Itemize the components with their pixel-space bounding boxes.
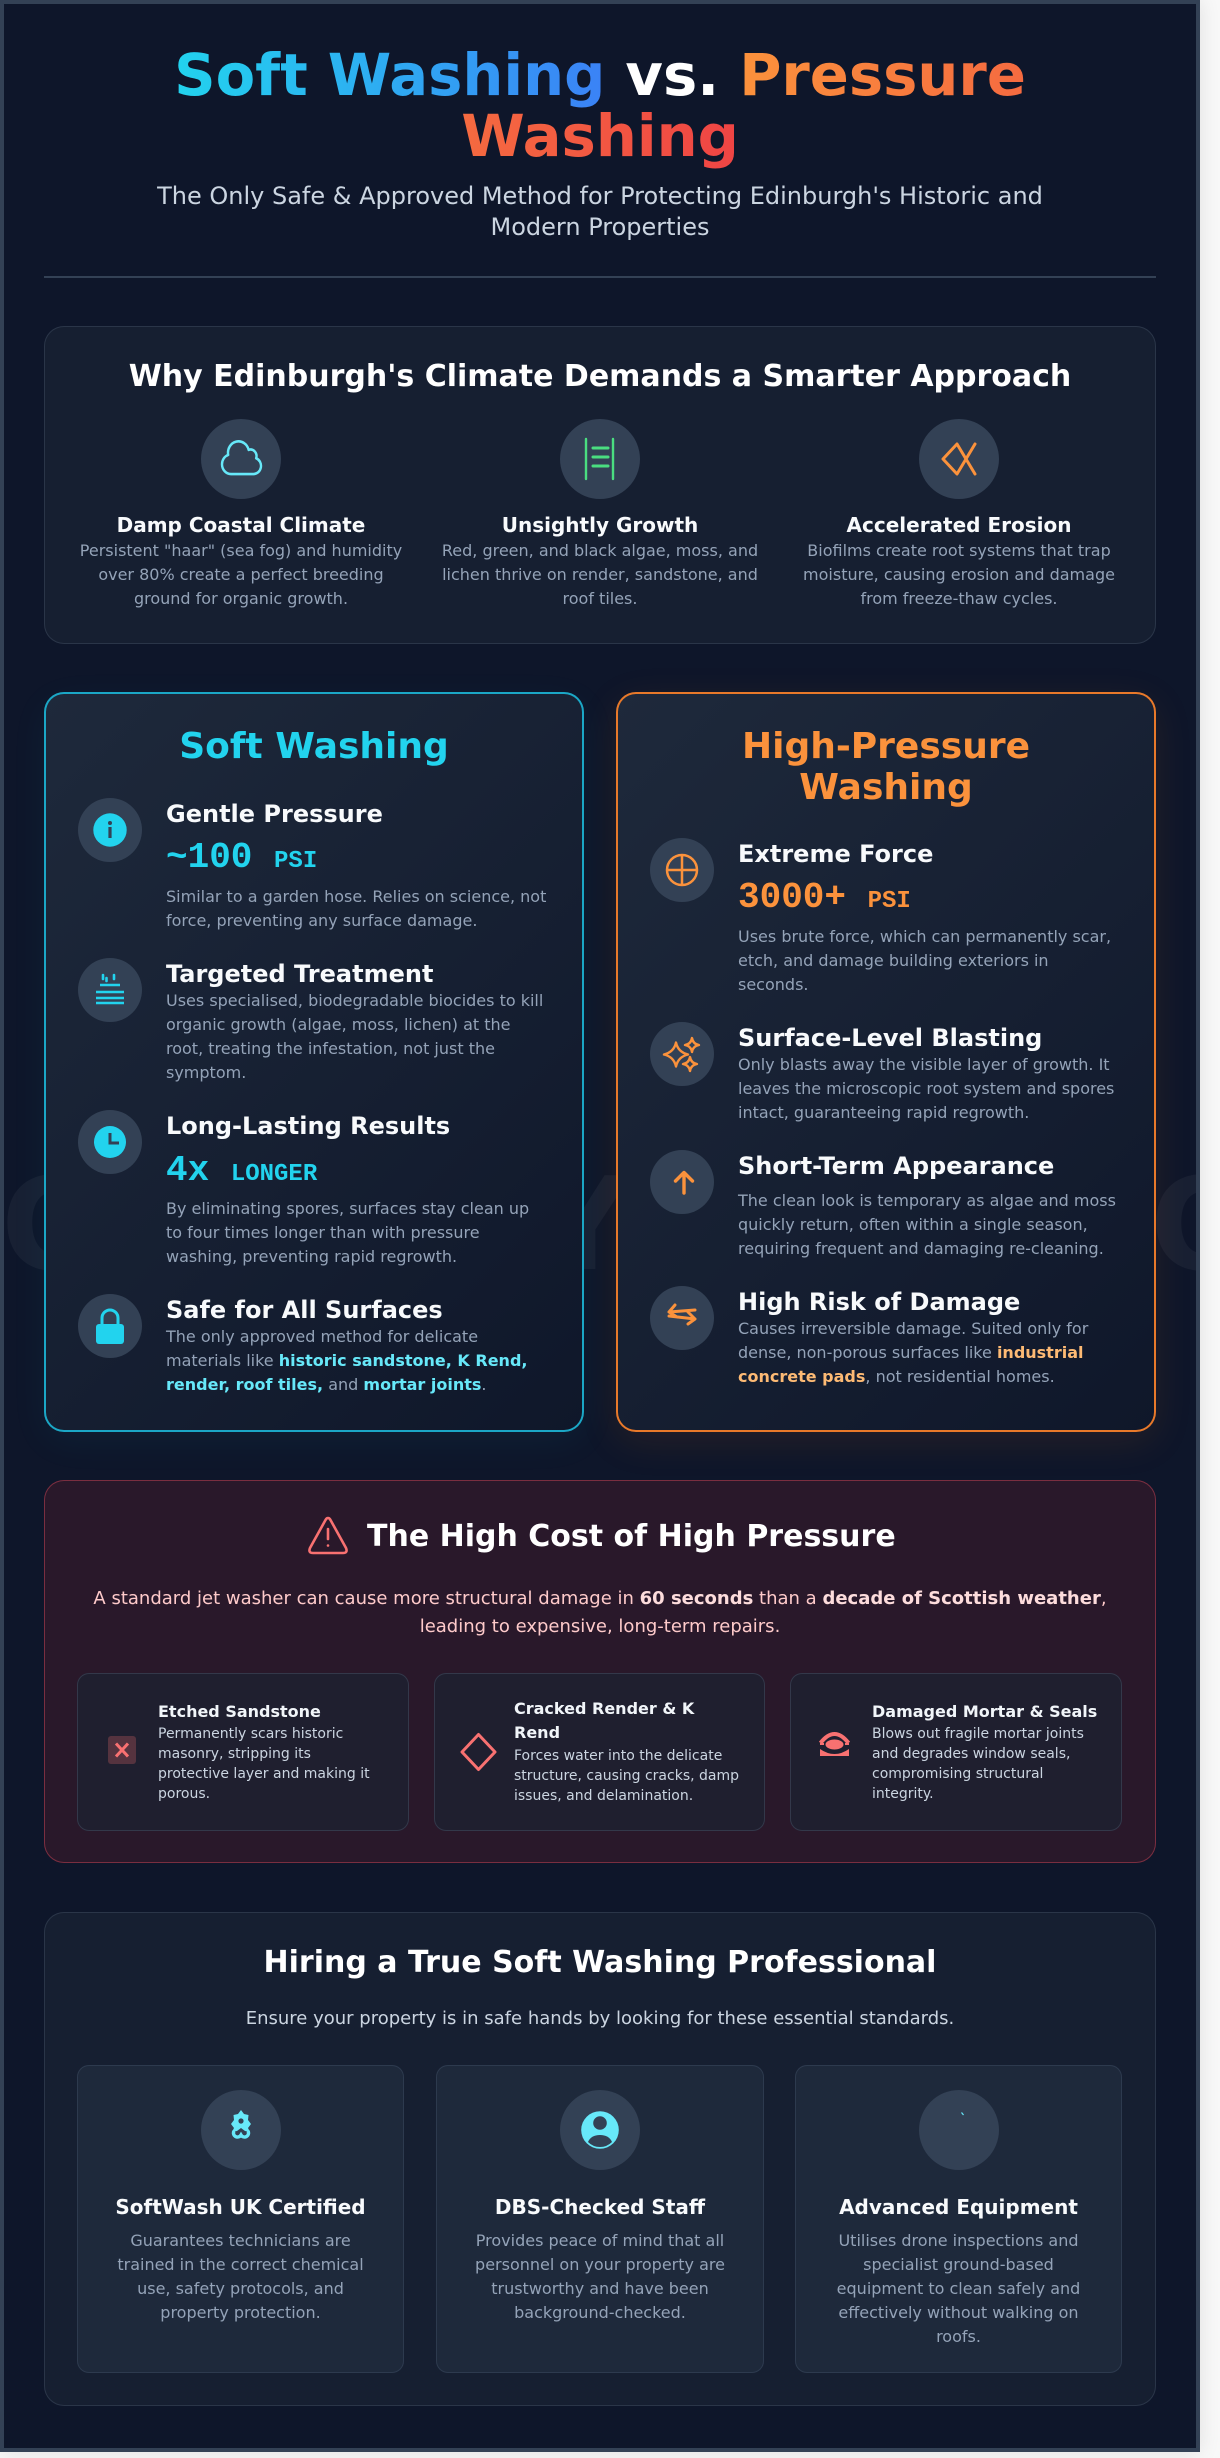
climate heading: Why Edinburgh's Climate Demands a Smarter Approach xyxy=(129,359,1071,394)
standard card: dbs-checked xyxy=(436,2065,764,2373)
icon: user xyxy=(560,2090,640,2170)
item description: dense, non-porous surfaces like industrial xyxy=(738,1343,1083,1362)
item description: The clean look is temporary as algae and moss xyxy=(738,1191,1116,1210)
item description: from freeze-thaw cycles. xyxy=(860,589,1058,608)
item description xyxy=(803,541,1115,608)
card description: protective layer and making it xyxy=(158,1766,370,1782)
card description: trustworthy and have been xyxy=(491,2279,709,2298)
warning heading with icon xyxy=(308,1516,896,1554)
item title: Long-Lasting Results xyxy=(166,1112,450,1140)
item description: over 80% create a perfect breeding xyxy=(98,565,384,584)
item description: intact, guaranteeing rapid regrowth. xyxy=(738,1103,1029,1122)
item description: Similar to a garden hose. Relies on science, not xyxy=(166,887,546,906)
subtitle xyxy=(157,182,1043,241)
icon: up arrow xyxy=(650,1150,714,1214)
item description xyxy=(738,927,1111,994)
item: surface-level blasting xyxy=(650,1022,1114,1122)
item title: Surface-Level Blasting xyxy=(738,1024,1042,1052)
card description xyxy=(514,1748,739,1804)
card description xyxy=(117,2231,364,2322)
item: extreme force xyxy=(650,838,1111,994)
stat: 4x LONGER xyxy=(166,1150,317,1191)
icon: lock xyxy=(78,1294,142,1358)
soft washing heading: Soft Washing xyxy=(179,726,449,767)
card description: Forces water into the delicate xyxy=(514,1748,722,1764)
card title xyxy=(514,1699,695,1742)
item description: root, treating the infestation, not just the xyxy=(166,1039,495,1058)
icon: treatment xyxy=(78,958,142,1022)
icon: diamond xyxy=(460,1732,496,1772)
item: high risk of damage xyxy=(650,1286,1088,1386)
item description: seconds. xyxy=(738,975,808,994)
panel: soft washing xyxy=(44,692,584,1432)
item title: Targeted Treatment xyxy=(166,960,433,988)
item description xyxy=(166,887,546,930)
item description: force, preventing any surface damage. xyxy=(166,911,477,930)
card description: issues, and delamination. xyxy=(514,1788,693,1804)
item description: Biofilms create root systems that trap xyxy=(807,541,1111,560)
item description xyxy=(738,1055,1114,1122)
item description: organic growth (algae, moss, lichen) at the xyxy=(166,1015,511,1034)
warning paragraph xyxy=(93,1588,1107,1637)
icon: exchange arrows xyxy=(650,1286,714,1350)
card description: masonry, stripping its xyxy=(158,1746,311,1762)
item description: Uses specialised, biodegradable biocides to kill xyxy=(166,991,543,1010)
item description xyxy=(738,1191,1116,1258)
item description: Persistent "haar" (sea fog) and humidity xyxy=(80,541,402,560)
item description xyxy=(166,1327,527,1394)
item description: Causes irreversible damage. Suited only for xyxy=(738,1319,1088,1338)
card title: Damaged Mortar & Seals xyxy=(872,1702,1097,1721)
climate item: damp coastal climate xyxy=(80,419,402,608)
item description: Only blasts away the visible layer of growth. It xyxy=(738,1055,1110,1074)
standard card: equipment xyxy=(795,2065,1122,2373)
panel: high-pressure washing xyxy=(616,692,1156,1432)
item description: leaves the microscopic root system and spores xyxy=(738,1079,1114,1098)
item: short-term appearance xyxy=(650,1150,1116,1258)
high-pressure heading: Washing xyxy=(799,767,973,808)
card description xyxy=(872,1726,1084,1802)
card title: Advanced Equipment xyxy=(839,2195,1078,2219)
title: Soft Washing vs. Pressure Washing xyxy=(174,42,1026,170)
card description: porous. xyxy=(158,1786,210,1802)
card description: Provides peace of mind that all xyxy=(476,2231,724,2250)
item description: Red, green, and black algae, moss, and xyxy=(442,541,758,560)
background watermark letters: Y xyxy=(537,1151,630,1300)
item description: render, roof tiles, and mortar joints. xyxy=(166,1375,486,1394)
card description xyxy=(158,1726,370,1802)
item description: lichen thrive on render, sandstone, and xyxy=(442,565,758,584)
icon: clock xyxy=(78,1110,142,1174)
panel: hiring a professional xyxy=(44,1912,1156,2406)
panel: high cost of high pressure xyxy=(44,1480,1156,1863)
panel: climate xyxy=(44,326,1156,644)
warning paragraph: A standard jet washer can cause more structural damage in 60 seconds than a decade of Scottish weather, xyxy=(93,1588,1107,1609)
card description: Utilises drone inspections and xyxy=(838,2231,1079,2250)
warning heading text: The High Cost of High Pressure xyxy=(367,1519,896,1554)
item description: concrete pads, not residential homes. xyxy=(738,1367,1055,1386)
item description: to four times longer than with pressure xyxy=(166,1223,480,1242)
high-pressure heading: High-Pressure xyxy=(742,726,1030,767)
item title: Extreme Force xyxy=(738,840,933,868)
card description: structure, causing cracks, damp xyxy=(514,1768,739,1784)
card title: SoftWash UK Certified xyxy=(115,2195,366,2219)
card description: Blows out fragile mortar joints xyxy=(872,1726,1084,1742)
card description: use, safety protocols, and xyxy=(137,2279,344,2298)
item description xyxy=(166,991,543,1082)
card description: trained in the correct chemical xyxy=(117,2255,364,2274)
card description: effectively without walking on xyxy=(838,2303,1079,2322)
icon: info xyxy=(78,798,142,862)
item title: Gentle Pressure xyxy=(166,800,383,828)
item description xyxy=(442,541,758,608)
card description: equipment to clean safely and xyxy=(837,2279,1080,2298)
item description: etch, and damage building exteriors in xyxy=(738,951,1049,970)
card title: Cracked Render & K xyxy=(514,1699,694,1718)
icon: mortar seal xyxy=(819,1732,850,1756)
card title: DBS-Checked Staff xyxy=(495,2195,705,2219)
card description: compromising structural xyxy=(872,1766,1043,1782)
item title: Short-Term Appearance xyxy=(738,1152,1054,1180)
item description: symptom. xyxy=(166,1063,246,1082)
card description: Guarantees technicians are xyxy=(130,2231,351,2250)
card description: roofs. xyxy=(936,2327,981,2346)
hiring intro: Ensure your property is in safe hands by looking for these essential standards. xyxy=(246,2008,954,2029)
item description: ground for organic growth. xyxy=(134,589,348,608)
icon: crosshair xyxy=(650,838,714,902)
damage card: cracked render xyxy=(434,1673,765,1831)
item: safe for all surfaces xyxy=(78,1294,527,1394)
card description: specialist ground-based xyxy=(863,2255,1054,2274)
card description: personnel on your property are xyxy=(475,2255,725,2274)
card description: integrity. xyxy=(872,1786,934,1802)
card description xyxy=(475,2231,725,2322)
icon: certification badge xyxy=(200,2090,280,2170)
card description: background-checked. xyxy=(514,2303,686,2322)
item description xyxy=(738,1319,1088,1386)
icon: equipment mark xyxy=(918,2090,998,2170)
icon: sparkles xyxy=(650,1022,714,1086)
item description: moisture, causing erosion and damage xyxy=(803,565,1115,584)
icon: x mark xyxy=(108,1736,136,1764)
card description xyxy=(795,2229,1122,2349)
item description: By eliminating spores, surfaces stay clean up xyxy=(166,1199,529,1218)
standard card: certified xyxy=(77,2065,404,2373)
background watermark letters: O xyxy=(4,1151,110,1300)
item description xyxy=(166,1199,529,1266)
damage card: damaged mortar xyxy=(790,1673,1122,1831)
icon: erosion xyxy=(919,419,999,499)
header divider xyxy=(44,276,1156,278)
card description: property protection. xyxy=(160,2303,321,2322)
high-pressure heading xyxy=(742,726,1030,808)
item description: requiring frequent and damaging re-cleaning. xyxy=(738,1239,1104,1258)
item description: washing, preventing rapid regrowth. xyxy=(166,1247,457,1266)
card description: Permanently scars historic xyxy=(158,1726,343,1742)
item description xyxy=(80,541,402,608)
item title: High Risk of Damage xyxy=(738,1288,1020,1316)
item: targeted treatment xyxy=(78,958,543,1082)
item: gentle pressure xyxy=(78,798,546,930)
item description: Uses brute force, which can permanently scar, xyxy=(738,927,1111,946)
item description: roof tiles. xyxy=(563,589,637,608)
climate item: unsightly growth xyxy=(442,419,758,608)
stat: 3000+ PSI xyxy=(738,877,911,918)
icon: cloud xyxy=(201,419,281,499)
item title: Safe for All Surfaces xyxy=(166,1296,443,1324)
subtitle: Modern Properties xyxy=(491,213,709,241)
card title: Etched Sandstone xyxy=(158,1702,321,1721)
item description: quickly return, often within a single season, xyxy=(738,1215,1088,1234)
item description: The only approved method for delicate xyxy=(166,1327,478,1346)
subtitle: The Only Safe & Approved Method for Protecting Edinburgh's Historic and xyxy=(157,182,1043,210)
item title: Unsightly Growth xyxy=(502,513,698,537)
warning paragraph: leading to expensive, long-term repairs. xyxy=(420,1616,780,1637)
item title: Damp Coastal Climate xyxy=(117,513,365,537)
card description: and degrades window seals, xyxy=(872,1746,1070,1762)
item: long-lasting results xyxy=(78,1110,529,1266)
icon: growth xyxy=(560,419,640,499)
damage card: etched sandstone xyxy=(77,1673,409,1831)
card title: Rend xyxy=(514,1723,560,1742)
item title: Accelerated Erosion xyxy=(847,513,1071,537)
hiring heading: Hiring a True Soft Washing Professional xyxy=(264,1945,936,1980)
stat: ~100 PSI xyxy=(166,837,317,878)
icon: warning triangle xyxy=(308,1516,348,1554)
item description: materials like historic sandstone, K Rend, xyxy=(166,1351,527,1370)
climate item: accelerated erosion xyxy=(803,419,1115,608)
